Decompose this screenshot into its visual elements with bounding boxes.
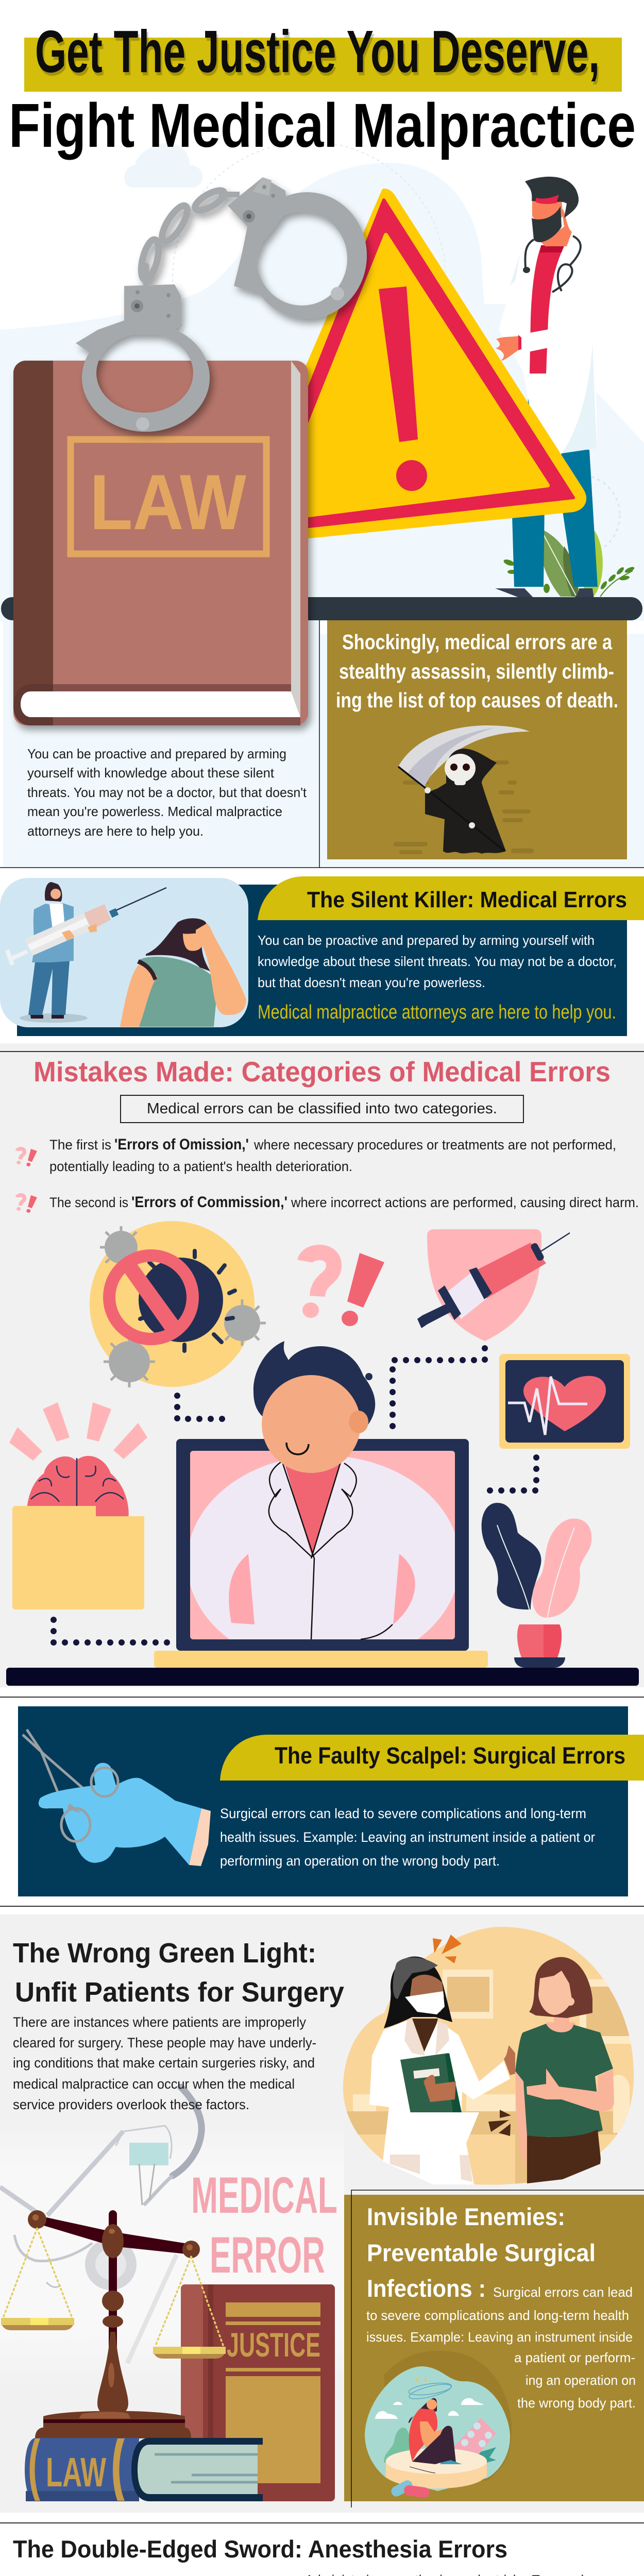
- prepared text: threats. You may not be a doctor, but that doesn't: [27, 785, 307, 800]
- doctor: [495, 177, 598, 609]
- body text: There are instances where patients are improperly: [13, 2014, 306, 2030]
- error types list: where necessary procedures or treatments are not performed,: [253, 1137, 616, 1153]
- title band: [24, 38, 622, 92]
- body: [220, 1806, 595, 1869]
- heading: The Silent Killer: Medical Errors: [307, 887, 627, 912]
- heading and body: ing an operation on: [526, 2372, 636, 2388]
- icon: heart monitor: [499, 1354, 630, 1449]
- figure: patient: [515, 1957, 614, 2183]
- panel: light background behind shocking fact: [3, 620, 644, 868]
- callout box: Medical errors can be classified into two categories.: [147, 1100, 497, 1117]
- heading and body: a patient or perform-: [514, 2350, 635, 2365]
- laptop base: [154, 1651, 488, 1668]
- icon: alert marks: [433, 1935, 462, 1963]
- panel: the silent killer: [0, 876, 644, 1036]
- error types list: The second is: [49, 1195, 128, 1210]
- illustration: justice book: JUSTICE: [227, 2326, 320, 2364]
- panel: invisible enemies: [344, 2190, 644, 2507]
- tab: silent killer: [258, 876, 644, 920]
- body: knowledge about these silent threats. You may not be a doctor,: [258, 954, 617, 969]
- plant: [503, 529, 635, 597]
- figure: doctor: [369, 1957, 515, 2185]
- icon: gloved hand with forceps: [23, 1730, 211, 1866]
- body text: service providers overlook these factors.: [13, 2097, 249, 2112]
- panel: double-edged sword: [0, 2522, 644, 2576]
- body: [258, 933, 617, 1023]
- prepared text: yourself with knowledge about these silent: [27, 765, 275, 781]
- prepared text: [27, 746, 307, 839]
- heading and body: to severe complications and long-term health: [366, 2308, 629, 2323]
- warning triangle: [231, 191, 584, 544]
- heading and body: Invisible Enemies:: [367, 2203, 565, 2230]
- folder: [12, 1506, 144, 1609]
- prepared text: You can be proactive and prepared by arming: [27, 746, 286, 761]
- law label: LAW: [90, 459, 246, 546]
- body: You can be proactive and prepared by arming yourself with: [258, 933, 595, 948]
- heading and body: issues. Example: Leaving an instrument inside: [366, 2329, 633, 2345]
- illustration: woman with pills: [365, 2351, 512, 2498]
- fact text: [336, 630, 618, 712]
- illustration: medical error paper: MEDICAL: [191, 2166, 337, 2224]
- illustration: law book: LAW: [46, 2449, 106, 2495]
- body: Surgical errors can lead to severe complications and long-term: [220, 1806, 586, 1821]
- error types list: The first is: [49, 1137, 111, 1153]
- cloud: [124, 143, 202, 188]
- shelf: [6, 1668, 639, 1686]
- icon: question and exclamation: [302, 1252, 384, 1326]
- icon: shield and syringe: [417, 1229, 570, 1341]
- icon: virus ban: [90, 1221, 266, 1387]
- heading and body: Preventable Surgical: [367, 2239, 596, 2266]
- body: but that doesn't mean you're powerless.: [258, 975, 485, 990]
- illustration: justice book: [181, 2284, 335, 2501]
- panel: the faulty scalpel: [0, 1697, 644, 1907]
- icon: pain marks: [488, 2110, 511, 2136]
- callout box: [121, 1095, 523, 1123]
- illustration: scales of justice: [1, 2210, 226, 2438]
- body text: medical malpractice can occur when the medical: [13, 2076, 295, 2092]
- law label: [71, 439, 266, 554]
- prepared text: attorneys are here to help you.: [27, 823, 204, 839]
- error types list: 'Errors of Commission,': [131, 1194, 287, 1211]
- heading and body: Surgical errors can lead: [493, 2284, 633, 2300]
- illustration: medical error paper: ERROR: [210, 2226, 325, 2283]
- law book: [13, 361, 308, 725]
- prepared text: mean you're powerless. Medical malpractice: [27, 804, 282, 819]
- heading: The Double-Edged Sword: Anesthesia Errors: [13, 2535, 507, 2563]
- heading: [13, 1938, 344, 2008]
- tab: surgical errors: [220, 1735, 644, 1781]
- error types list: potentially leading to a patient's health deterioration.: [49, 1159, 352, 1174]
- heading and body: the wrong body part.: [517, 2395, 636, 2411]
- panel: mistakes made: [0, 1043, 644, 1687]
- handcuffs: [76, 177, 367, 432]
- body text: cleared for surgery. These people may have underly-: [13, 2035, 316, 2050]
- illustration: doctor and patient: [340, 1924, 644, 2187]
- hero section: [0, 18, 644, 725]
- icon: grim reaper: [394, 725, 534, 854]
- icon: potted plant: [482, 1503, 591, 1668]
- icon: brain alert: [9, 1402, 147, 1609]
- panel: shocking fact: [0, 620, 644, 868]
- body text: [13, 2014, 316, 2112]
- heading and body: [366, 2203, 636, 2411]
- heading: Unfit Patients for Surgery: [15, 1977, 344, 2008]
- illustration: law book: [25, 2438, 263, 2501]
- illustration: doctor on laptop: [154, 1341, 488, 1669]
- error types list: 'Errors of Omission,': [114, 1136, 249, 1153]
- body: health issues. Example: Leaving an instrument inside a patient or: [220, 1829, 595, 1845]
- shelf: [1, 597, 642, 620]
- illustration: syringe doctor and patient: [5, 882, 246, 1027]
- heading and body: Infections :: [367, 2275, 486, 2302]
- title: [9, 18, 636, 160]
- panel: wrong green light: [0, 1914, 644, 2513]
- body: performing an operation on the wrong body part.: [220, 1853, 500, 1869]
- heading: The Wrong Green Light:: [13, 1938, 316, 1969]
- connector dots: [54, 1348, 536, 1642]
- illustration: medical error paper: [0, 2087, 344, 2385]
- error types list: [16, 1136, 639, 1213]
- heading: Mistakes Made: Categories of Medical Errors: [33, 1056, 611, 1088]
- body text: ing conditions that make certain surgeries risky, and: [13, 2055, 315, 2071]
